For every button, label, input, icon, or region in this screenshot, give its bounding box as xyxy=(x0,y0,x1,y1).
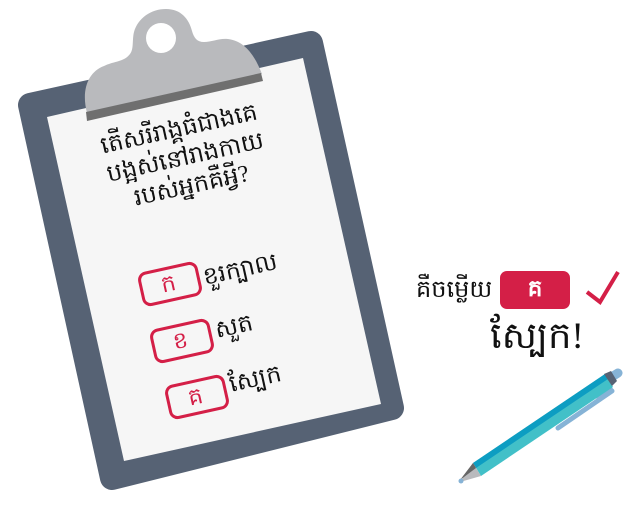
pen clip root xyxy=(596,385,614,402)
option B label: សួត xyxy=(213,310,256,346)
pen barrel edge xyxy=(473,374,608,468)
answer badge box xyxy=(500,271,570,309)
clipboard board xyxy=(30,43,392,478)
option A letter: ក xyxy=(159,270,178,297)
answer badge xyxy=(500,271,570,309)
clip hole xyxy=(146,23,176,53)
option A box xyxy=(138,262,202,306)
answer line label: គឺចម្លើយ xyxy=(416,273,492,303)
pen button xyxy=(610,373,618,378)
pen point xyxy=(458,478,464,484)
clip body xyxy=(85,9,262,113)
option A label: ខួរក្បាល xyxy=(201,249,280,293)
pen collar xyxy=(604,371,617,386)
option C label: ស្បែក xyxy=(226,358,284,398)
icon: check mark xyxy=(587,272,618,302)
clipboard xyxy=(30,9,392,478)
option B letter: ខ xyxy=(171,327,190,354)
pen tip shade xyxy=(460,463,476,480)
answer badge letter: គ xyxy=(528,276,542,301)
option B xyxy=(150,310,256,363)
pen barrel xyxy=(473,374,613,476)
paper sheet xyxy=(47,58,381,461)
clip shadow band xyxy=(86,73,263,121)
pen tip xyxy=(460,463,481,482)
question text xyxy=(97,97,272,216)
icon: pen xyxy=(458,371,618,484)
question text: តើសរីរាង្គធំជាងគេ xyxy=(97,97,260,160)
question text: បង្អស់នៅរាងកាយ xyxy=(104,125,266,188)
answer word: ស្បែក! xyxy=(490,313,584,358)
clip xyxy=(85,9,263,121)
option C xyxy=(165,358,284,419)
option C letter: គ xyxy=(186,383,205,410)
option A xyxy=(138,249,280,306)
question text: របស់អ្នកគឺអ្វី? xyxy=(131,157,252,212)
option B box xyxy=(150,319,214,363)
pen clip xyxy=(558,391,612,428)
option C box xyxy=(165,375,229,419)
